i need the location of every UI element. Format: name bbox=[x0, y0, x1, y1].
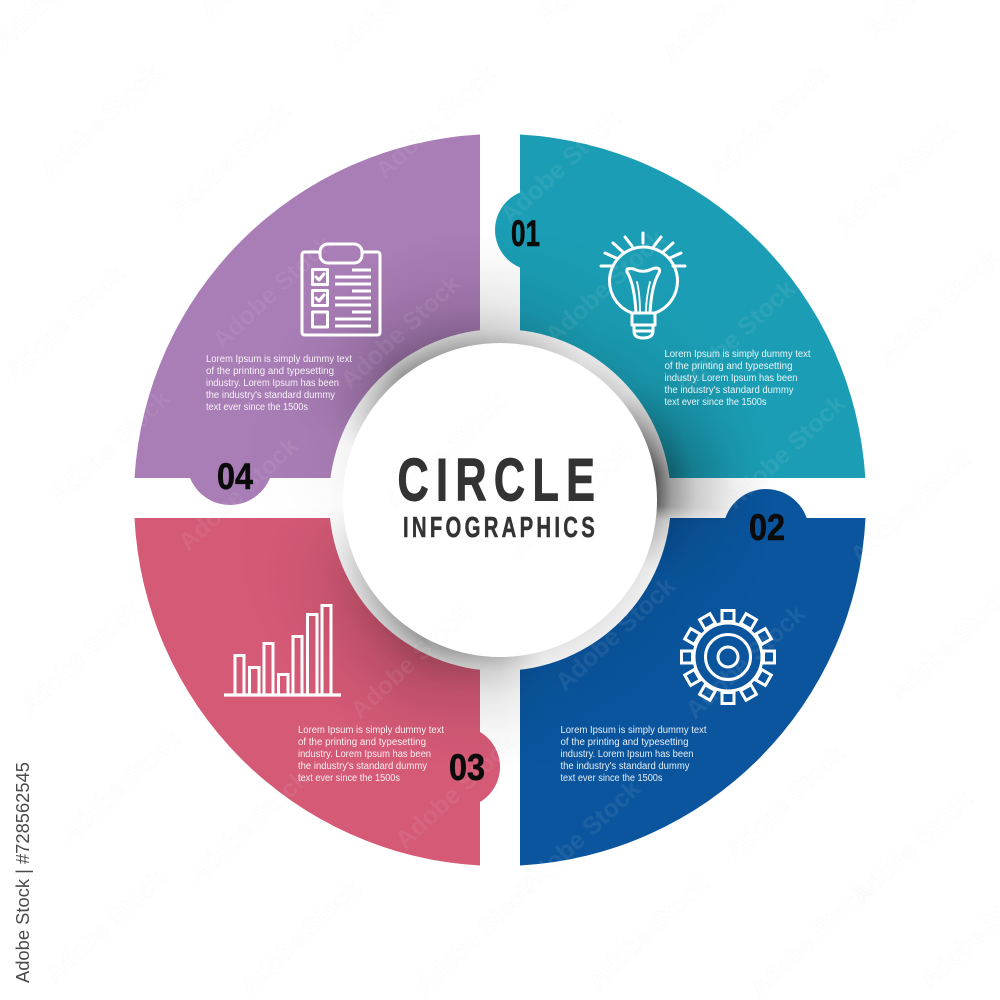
panel: 01 teal quadrant bbox=[495, 134, 865, 478]
text block 02: the industry's standard dummy bbox=[560, 761, 690, 772]
content layer: title, numbers, icons, text: Adobe Stock bbox=[495, 105, 626, 229]
text block 03: the industry's standard dummy bbox=[298, 761, 427, 772]
icon: gear bbox=[682, 610, 774, 704]
text block 01: industry. Lorem Ipsum has been bbox=[664, 373, 798, 384]
text block 01: text ever since the 1500s bbox=[664, 397, 766, 408]
content layer: title, numbers, icons, text: Adobe Stock bbox=[680, 600, 811, 724]
content layer: title, numbers, icons, text: Adobe Stock bbox=[55, 725, 186, 849]
text block 04: text ever since the 1500s bbox=[206, 402, 308, 413]
content layer: title, numbers, icons, text: Adobe Stock bbox=[207, 230, 338, 354]
panel: 04 purple quadrant bbox=[134, 134, 480, 505]
content layer: title, numbers, icons, text: Adobe Stock bbox=[847, 785, 978, 909]
text block 01 bbox=[664, 349, 811, 408]
icon: clipboard checklist bbox=[302, 244, 380, 335]
content layer: title, numbers, icons, text: Adobe Stock bbox=[0, 260, 131, 384]
text block 03: text ever since the 1500s bbox=[298, 773, 400, 784]
title: CIRCLE bbox=[398, 448, 602, 514]
content layer: title, numbers, icons, text: Adobe Stock bbox=[235, 875, 366, 999]
text block 04: Lorem Ipsum is simply dummy text bbox=[206, 354, 352, 365]
text block 02: of the printing and typesetting bbox=[560, 737, 688, 748]
content layer: title, numbers, icons, text: Adobe Stock bbox=[370, 60, 501, 184]
content layer: title, numbers, icons, text: Adobe Stock bbox=[720, 390, 851, 514]
content layer: title, numbers, icons, text: Adobe Stock bbox=[720, 740, 851, 864]
text block 03: Lorem Ipsum is simply dummy text bbox=[298, 725, 444, 736]
content layer: title, numbers, icons, text: Adobe Stock bbox=[410, 875, 541, 999]
content layer: title, numbers, icons, text: Adobe Stock bbox=[515, 775, 646, 899]
text block 02: text ever since the 1500s bbox=[560, 773, 662, 784]
icon: light bulb bbox=[601, 233, 685, 338]
text block 03: industry. Lorem Ipsum has been bbox=[298, 749, 431, 760]
text block 01: the industry's standard dummy bbox=[664, 385, 794, 396]
content layer: title, numbers, icons, text: Adobe Stock bbox=[583, 870, 714, 994]
content layer: title, numbers, icons, text: Adobe Stock bbox=[380, 390, 511, 514]
content layer: title, numbers, icons, text: Adobe Stock bbox=[15, 595, 146, 719]
content layer: title, numbers, icons, text: Adobe Stock bbox=[873, 245, 1000, 369]
content layer: title, numbers, icons, text: Adobe Stock bbox=[550, 572, 681, 696]
stock credit: Adobe Stock | #728562545 bbox=[12, 762, 33, 983]
content layer: title, numbers, icons, text: Adobe Stock bbox=[830, 115, 961, 239]
title: INFOGRAPHICS bbox=[403, 512, 598, 544]
content layer: title, numbers, icons, text: Adobe Stock bbox=[703, 60, 834, 184]
content layer: title, numbers, icons, text: Adobe Stock bbox=[505, 440, 636, 564]
content layer: title, numbers, icons, text: Adobe Stock bbox=[540, 225, 671, 349]
content layer: title, numbers, icons, text: Adobe Stock bbox=[45, 385, 176, 509]
content layer: title, numbers, icons, text: Adobe Stock bbox=[183, 765, 314, 889]
text block 02 bbox=[560, 725, 707, 784]
number 04: 04 bbox=[217, 456, 253, 497]
text block 01: of the printing and typesetting bbox=[664, 361, 792, 372]
text block 01: Lorem Ipsum is simply dummy text bbox=[664, 349, 811, 360]
content layer: title, numbers, icons, text: Adobe Stock bbox=[165, 98, 296, 222]
content layer: title, numbers, icons, text: Adobe Stock bbox=[345, 600, 476, 724]
soft drop shadow around centre circle bbox=[303, 268, 752, 733]
text block 04: industry. Lorem Ipsum has been bbox=[206, 378, 339, 389]
content layer: title, numbers, icons, text: Adobe Stock bbox=[845, 445, 976, 569]
content layer: title, numbers, icons, text: Adobe Stock bbox=[35, 60, 166, 184]
icon: bar chart bbox=[224, 606, 341, 695]
title bbox=[398, 448, 602, 544]
content layer: title, numbers, icons, text: Adobe Stock bbox=[390, 730, 521, 854]
text block 02: Lorem Ipsum is simply dummy text bbox=[560, 725, 707, 736]
text block 03 bbox=[298, 725, 444, 784]
content layer: title, numbers, icons, text: Adobe Stock bbox=[335, 270, 466, 394]
number 03: 03 bbox=[449, 747, 485, 788]
number 01: 01 bbox=[511, 213, 540, 254]
content layer: title, numbers, icons, text: Adobe Stock bbox=[745, 878, 876, 1000]
content layer: title, numbers, icons, text: Adobe Stock bbox=[670, 275, 801, 399]
panel: 02 blue quadrant bbox=[520, 489, 866, 866]
text block 04: the industry's standard dummy bbox=[206, 390, 335, 401]
content layer: title, numbers, icons, text: Adobe Stock bbox=[40, 865, 171, 989]
text block 02: industry. Lorem Ipsum has been bbox=[560, 749, 694, 760]
text block 04 bbox=[206, 354, 352, 413]
text block 04: of the printing and typesetting bbox=[206, 366, 334, 377]
content layer: title, numbers, icons, text: Adobe Stock bbox=[173, 432, 304, 556]
centre circle outer ring base bbox=[329, 329, 671, 671]
text block 03: of the printing and typesetting bbox=[298, 737, 426, 748]
centre circle white disc bbox=[343, 343, 657, 657]
number 02: 02 bbox=[749, 507, 785, 548]
panel: 03 pink quadrant bbox=[134, 518, 500, 866]
